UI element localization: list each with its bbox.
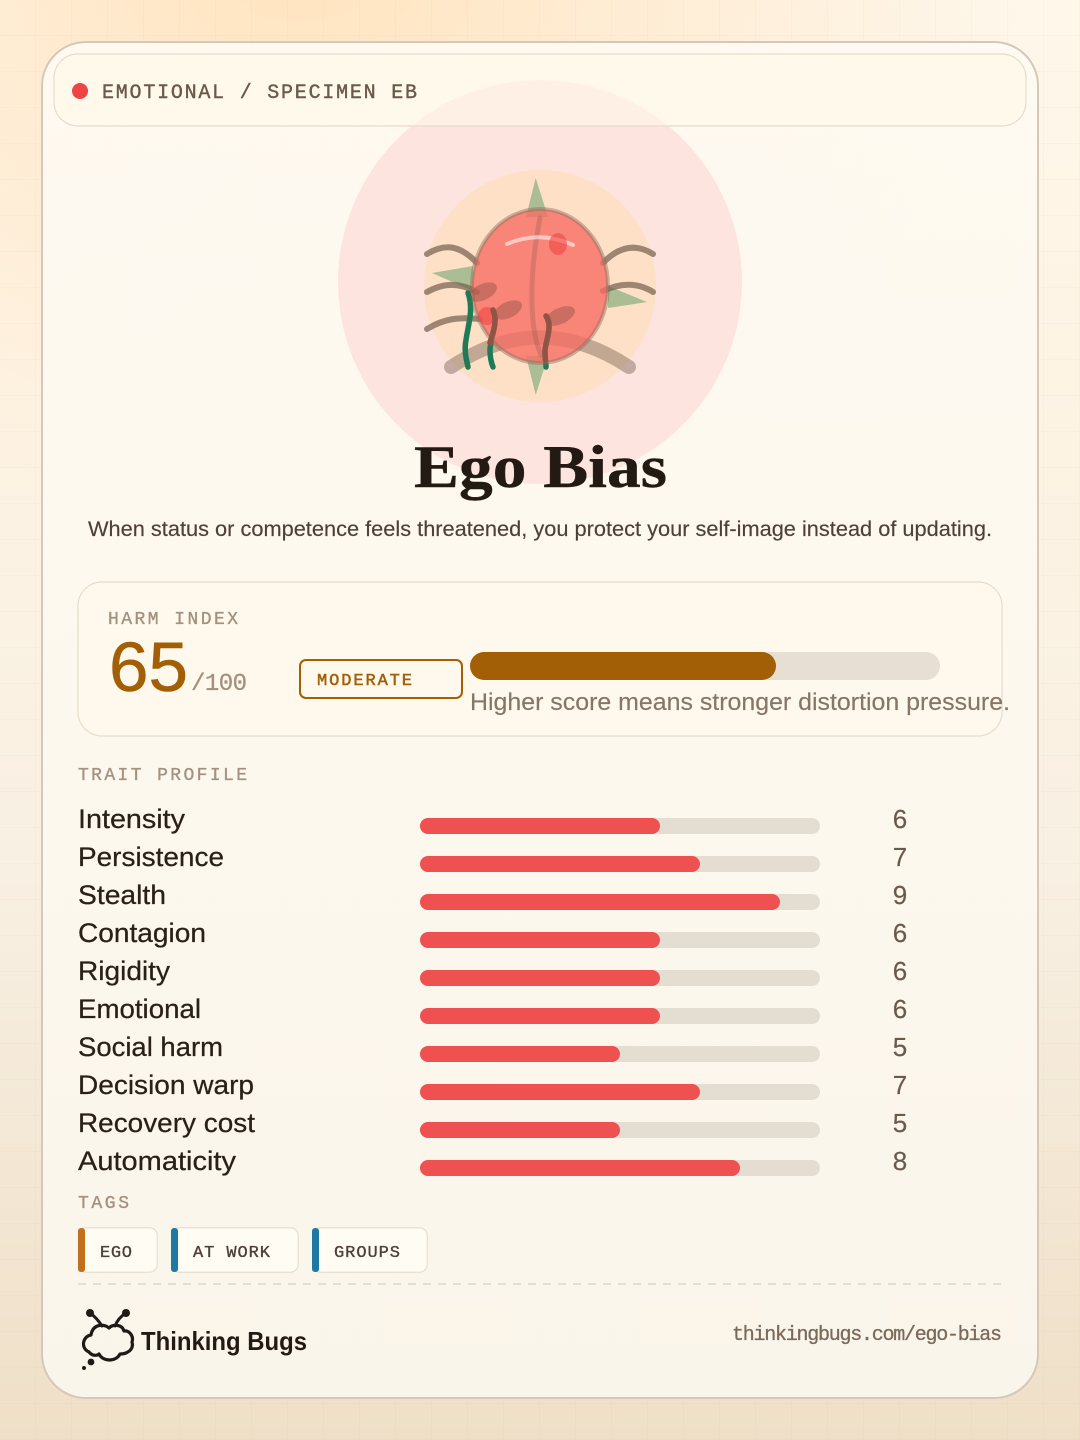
trait: emotional: 6 [893, 994, 907, 1024]
halo circle [338, 80, 742, 484]
score denominator: /100 [191, 671, 247, 698]
trait: contagion: 6 [893, 918, 907, 948]
trait: stealth [78, 880, 907, 910]
header strip [54, 54, 1026, 126]
title: Ego Bias [414, 434, 667, 500]
trait: intensity [78, 804, 907, 834]
harm bar [470, 652, 940, 680]
harm label: HARM INDEX [108, 610, 238, 630]
trait: rigidity [78, 956, 907, 986]
tags row [78, 1228, 427, 1272]
trait profile heading: TRAIT PROFILE [78, 766, 247, 786]
severity badge: MODERATE [317, 672, 412, 691]
trait: rigidity: Rigidity [78, 956, 171, 986]
trait: persistence [78, 842, 907, 872]
description: When status or competence feels threatened, you protect your self-image instead of updating. [88, 517, 992, 541]
harm score: 65 [109, 628, 188, 706]
trait: emotional [78, 994, 907, 1024]
source url: thinkingbugs.com/ego-bias [732, 1324, 1002, 1347]
trait: social harm: 5 [893, 1032, 907, 1062]
trait: stealth: 9 [893, 880, 907, 910]
tag: at work [171, 1228, 298, 1272]
panel: harm index [78, 582, 1010, 736]
category label: EMOTIONAL / SPECIMEN EB [102, 82, 417, 105]
icon: thinking bug [82, 1309, 132, 1370]
trait: recovery cost [78, 1108, 907, 1138]
trait: contagion: Contagion [78, 918, 206, 948]
trait: automaticity [78, 1146, 907, 1176]
trait: decision warp: Decision warp [78, 1070, 254, 1100]
trait: decision warp: 7 [893, 1070, 907, 1100]
tag: ego: EGO [100, 1244, 132, 1263]
tag: ego [78, 1228, 157, 1272]
tag: at work: AT WORK [193, 1244, 271, 1263]
trait: intensity: Intensity [78, 804, 186, 834]
trait: persistence: Persistence [78, 842, 224, 872]
trait: contagion [78, 918, 907, 948]
tags heading: TAGS [78, 1194, 129, 1214]
severity badge [300, 660, 462, 698]
trait: automaticity: 8 [893, 1146, 907, 1176]
trait: intensity: 6 [893, 804, 907, 834]
trait: persistence: 7 [893, 842, 907, 872]
tag: groups [312, 1228, 427, 1272]
trait: decision warp [78, 1070, 907, 1100]
trait chart [78, 804, 907, 1176]
brand logo [82, 1309, 307, 1370]
category dot [72, 83, 88, 99]
trait: stealth: Stealth [78, 880, 166, 910]
trait: recovery cost: Recovery cost [78, 1108, 256, 1138]
trait: automaticity: Automaticity [78, 1146, 237, 1176]
brand name: Thinking Bugs [141, 1326, 307, 1356]
harm caption: Higher score means stronger distortion pressure. [470, 689, 1010, 716]
tag: groups: GROUPS [334, 1244, 400, 1263]
trait: emotional: Emotional [78, 994, 201, 1024]
trait: social harm: Social harm [78, 1032, 223, 1062]
bug illustration [424, 170, 656, 402]
trait: rigidity: 6 [893, 956, 907, 986]
trait: recovery cost: 5 [893, 1108, 907, 1138]
trait: social harm [78, 1032, 907, 1062]
